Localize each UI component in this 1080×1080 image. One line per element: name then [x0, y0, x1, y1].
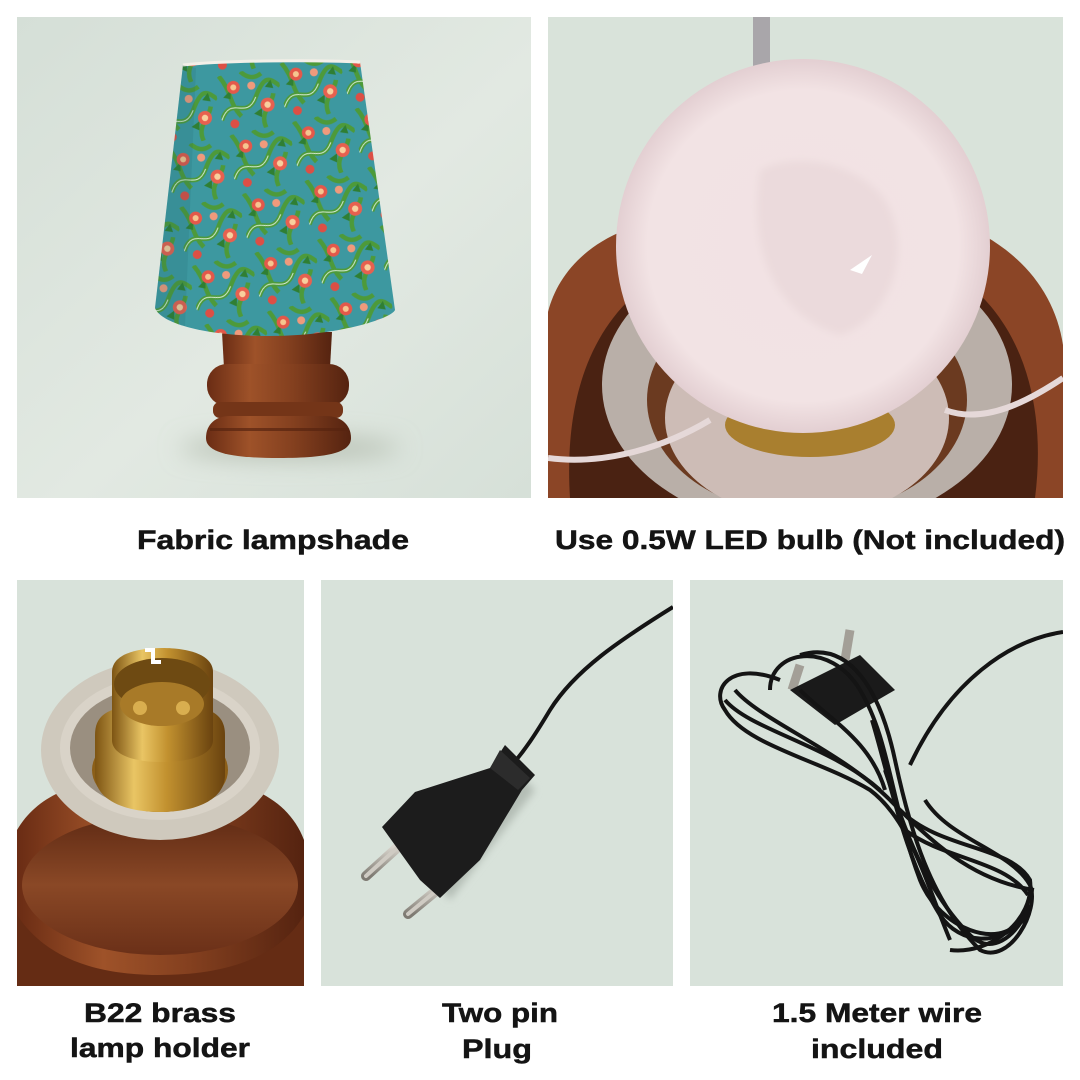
- heading: wire length: 1.5 Meter wire: [772, 998, 982, 1028]
- cable loops: [548, 378, 1063, 460]
- plug body: [382, 745, 535, 898]
- panel: brass lamp holder photo: [17, 580, 304, 986]
- heading: wire length: [772, 998, 982, 1064]
- heading: brass lamp holder: lamp holder: [70, 1033, 251, 1063]
- heading: two pin plug: [442, 998, 558, 1064]
- coiled plug: [790, 630, 895, 725]
- black cable: [512, 607, 673, 765]
- plug shadow: [443, 781, 536, 900]
- fabric lampshade: [155, 60, 395, 336]
- metal washer: [41, 660, 279, 840]
- heading: LED bulb: Use 0.5W LED bulb (Not included): [555, 525, 1065, 555]
- panel: LED bulb photo: [548, 17, 1063, 530]
- panel: coiled wire photo: [690, 580, 1063, 986]
- plug collar: [490, 750, 530, 790]
- heading: brass lamp holder: B22 brass: [84, 998, 236, 1028]
- coiled black wire: [720, 632, 1063, 953]
- wooden lamp base: [206, 332, 351, 458]
- heading: two pin plug: Two pin: [442, 998, 558, 1028]
- heading: wire length: included: [811, 1034, 943, 1064]
- heading: fabric lampshade: Fabric lampshade: [137, 525, 409, 555]
- heading: brass lamp holder: [70, 998, 251, 1063]
- panel: fabric lampshade photo: [17, 17, 531, 498]
- icon: frosted bulb: [616, 59, 990, 433]
- wooden base: [17, 775, 304, 986]
- heading: two pin plug: Plug: [462, 1034, 532, 1064]
- panel: two pin plug photo: [321, 580, 673, 986]
- icon: brass bayonet holder: [92, 648, 228, 812]
- wooden lamp body behind bulb: [548, 234, 1063, 498]
- metal pins: [366, 847, 442, 914]
